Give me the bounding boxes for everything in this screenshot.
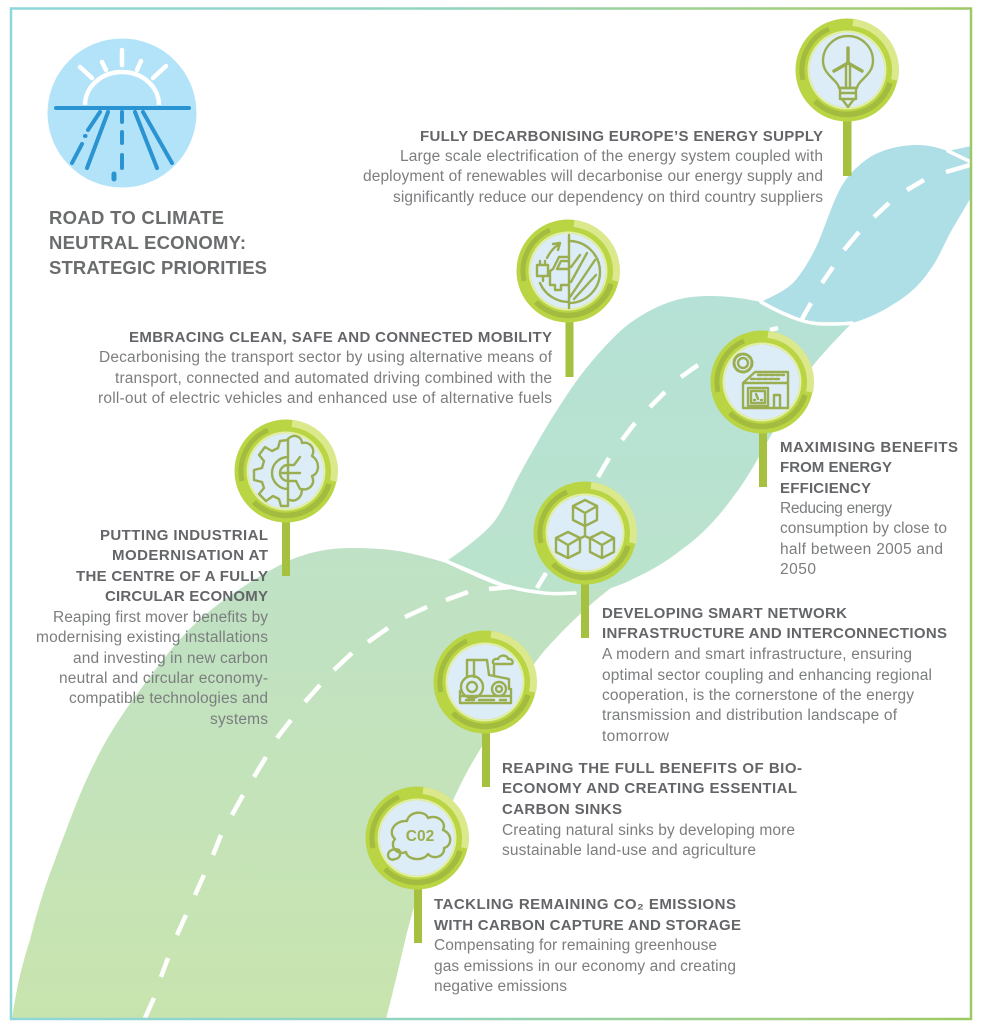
text: energy efficiency: 2050 [780, 561, 816, 578]
pin: energy supply [796, 18, 898, 176]
text: smart network: DEVELOPING SMART NETWORK [602, 605, 847, 622]
title: ROAD TO CLIMATE [49, 207, 224, 228]
text: industrial modernisation: Reaping first mover benefits by [53, 609, 268, 626]
text: mobility: roll-out of electric vehicles and enhanced use of alternative fuels [98, 390, 552, 407]
icon: connected cubes [556, 500, 614, 558]
text: energy efficiency: half between 2005 and [780, 541, 943, 558]
text: bio-economy [502, 760, 802, 859]
text: mobility: transport, connected and automated driving combined with the [115, 370, 552, 387]
text: carbon capture: Compensating for remaining greenhouse [434, 937, 717, 954]
text: energy efficiency: EFFICIENCY [780, 480, 871, 497]
text: energy efficiency [780, 439, 958, 578]
pin: energy efficiency [710, 330, 814, 487]
road segment: green [12, 548, 611, 1019]
icon: CO2 cloud: C02 [406, 828, 434, 845]
text: energy efficiency: consumption by close to [780, 520, 947, 537]
text: smart network [602, 605, 947, 745]
text: mobility: Decarbonising the transport sector by using alternative means of [99, 349, 553, 366]
title: NEUTRAL ECONOMY: [49, 232, 246, 253]
text: carbon capture: TACKLING REMAINING CO₂ EMISSIONS [434, 896, 736, 913]
text: industrial modernisation: compatible technologies and [69, 690, 268, 707]
text: carbon capture: gas emissions in our economy and creating [434, 958, 736, 975]
pin: industrial modernisation [234, 420, 338, 576]
pin: carbon capture [366, 786, 468, 943]
text: carbon capture [434, 896, 741, 995]
text: energy supply: significantly reduce our dependency on third country suppliers [393, 189, 823, 206]
text: bio-economy: sustainable land-use and agriculture [502, 842, 756, 859]
text: carbon capture: WITH CARBON CAPTURE AND STORAGE [434, 917, 741, 934]
text: energy efficiency: FROM ENERGY [780, 459, 892, 476]
pin: mobility [516, 220, 620, 377]
pin: bio-economy [434, 630, 536, 787]
title: STRATEGIC PRIORITIES [49, 257, 267, 278]
icon: gear and solar house [734, 354, 788, 408]
text: carbon capture: negative emissions [434, 978, 567, 995]
text: bio-economy: REAPING THE FULL BENEFITS OF BIO- [502, 760, 802, 777]
text: energy efficiency: MAXIMISING BENEFITS [780, 439, 958, 456]
text: energy supply: FULLY DECARBONISING EUROPE’S ENERGY SUPPLY [420, 128, 823, 145]
icon: CO2 cloud [388, 813, 450, 860]
text: bio-economy: CARBON SINKS [502, 801, 622, 818]
text: smart network: transmission and distribution landscape of [602, 707, 898, 724]
road segment: teal [448, 296, 852, 593]
icon: sun over road [48, 38, 196, 188]
road centre dashes [145, 165, 970, 1018]
text: bio-economy: ECONOMY AND CREATING ESSENTIAL [502, 780, 797, 797]
text: bio-economy: Creating natural sinks by developing more [502, 822, 795, 839]
text: industrial modernisation: modernising existing installations [36, 629, 268, 646]
text: industrial modernisation: neutral and circular economy- [59, 670, 268, 687]
pin: smart network [534, 482, 636, 638]
text: smart network: optimal sector coupling and enhancing regional [602, 667, 932, 684]
icon: gear and brain [254, 436, 318, 506]
text: energy supply: deployment of renewables will decarbonise our energy supply and [363, 168, 823, 185]
text: smart network: tomorrow [602, 728, 670, 745]
text: industrial modernisation: THE CENTRE OF A FULLY [76, 568, 268, 585]
text: mobility [98, 329, 553, 407]
text: energy efficiency: Reducing energy [780, 500, 892, 517]
icon: wind turbine in light bulb [823, 36, 873, 107]
text: energy supply: Large scale electrification of the energy system coupled with [400, 148, 823, 165]
text: industrial modernisation: systems [210, 711, 268, 728]
text: smart network: INFRASTRUCTURE AND INTERCONNECTIONS [602, 625, 947, 642]
text: smart network: A modern and smart infrastructure, ensuring [602, 646, 912, 663]
title [49, 207, 267, 278]
road segment: blue [761, 145, 971, 323]
icon: car and leaf [537, 235, 600, 308]
text: industrial modernisation: CIRCULAR ECONOMY [105, 588, 268, 605]
icon: tractor [460, 656, 513, 703]
text: industrial modernisation: MODERNISATION AT [112, 547, 268, 564]
text: mobility: EMBRACING CLEAN, SAFE AND CONNECTED MOBILITY [129, 329, 552, 346]
text: industrial modernisation: and investing in new carbon [73, 650, 268, 667]
text: smart network: cooperation, is the cornerstone of the energy [602, 687, 914, 704]
road edges [444, 151, 971, 594]
text: industrial modernisation: PUTTING INDUSTRIAL [100, 527, 268, 544]
text: energy supply [363, 128, 823, 206]
text: industrial modernisation [36, 527, 268, 728]
